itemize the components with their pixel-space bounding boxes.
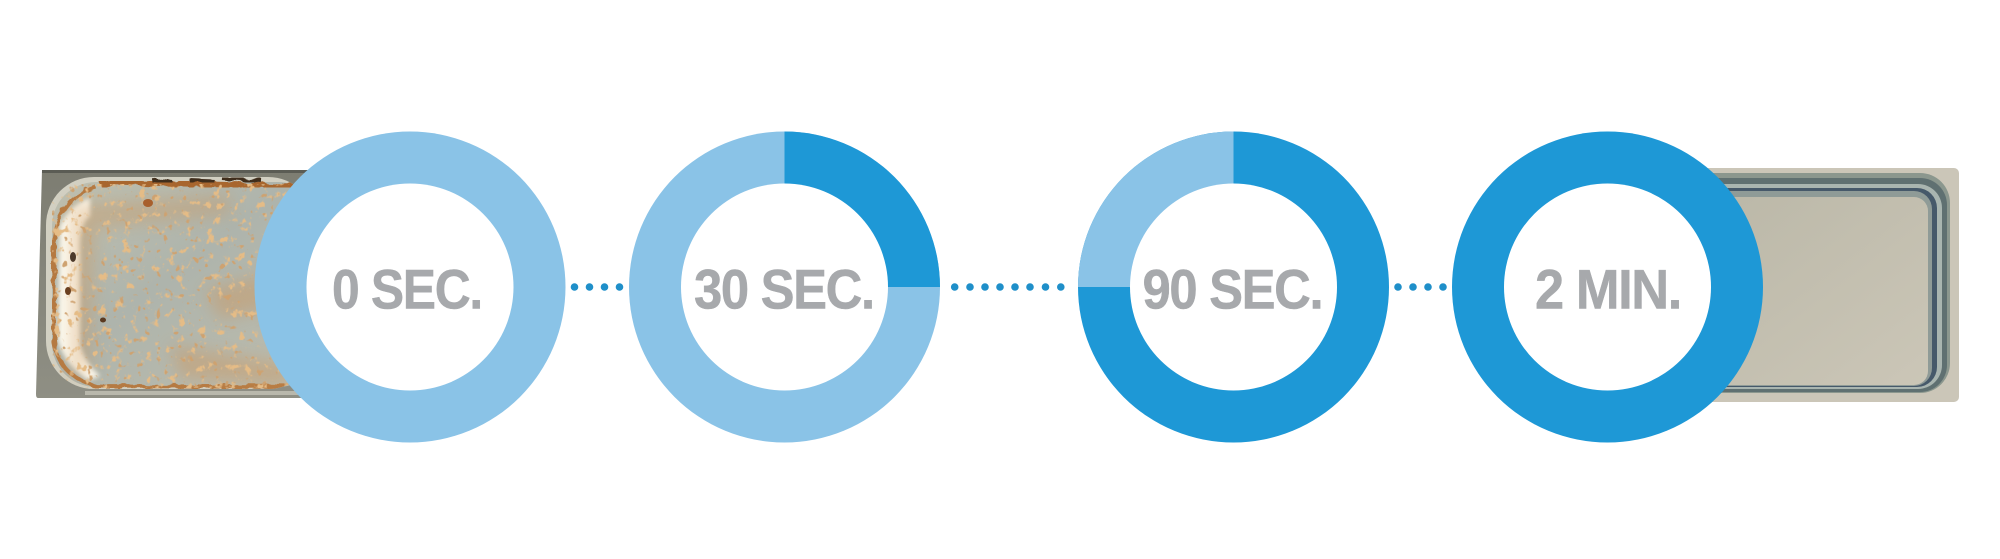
dotted connector 3 (1394, 283, 1447, 291)
step: 30 sec. (629, 132, 940, 442)
diffuse orange staining (70, 195, 230, 375)
ring: three quarters filled (1078, 132, 1389, 442)
dotted connector 1 (571, 283, 623, 291)
step: 90 sec. (1078, 132, 1389, 442)
label: 90 sec.: 90 SEC. (1142, 259, 1322, 321)
ring: empty (254, 132, 566, 442)
photo: clean steel pan (1680, 168, 1959, 402)
label: 2 min.: 2 MIN. (1535, 259, 1681, 321)
ring: one quarter filled (629, 132, 940, 442)
dotted connector 2 (951, 283, 1065, 291)
label: 30 sec.: 30 SEC. (694, 259, 874, 321)
photo: dirty rusty pan (36, 170, 330, 398)
step: 0 sec. (254, 132, 566, 442)
rust crust along the rim (54, 187, 317, 387)
infographic canvas (36, 132, 1959, 442)
white highlight along the left wall (58, 198, 100, 380)
scattered rust flakes (52, 184, 288, 388)
label: 0 sec.: 0 SEC. (332, 259, 482, 321)
ring: full (1452, 132, 1763, 442)
step: 2 min. (1452, 132, 1763, 442)
